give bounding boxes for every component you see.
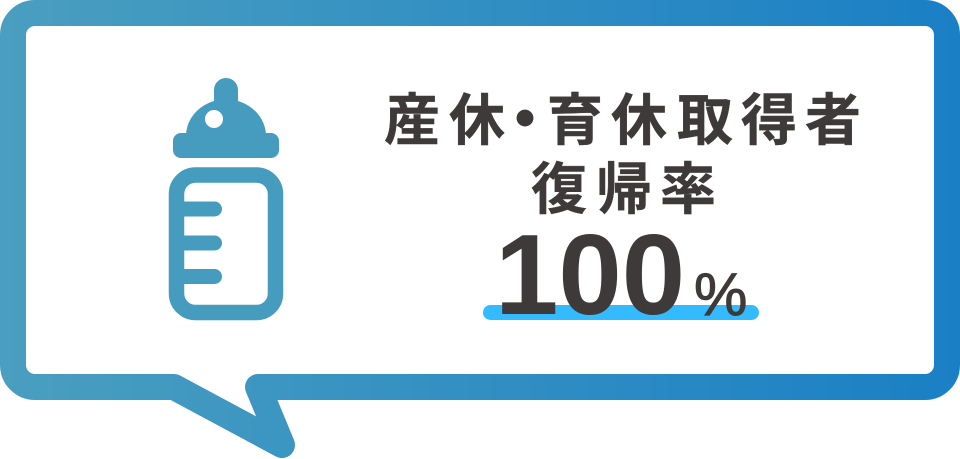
heading line 1: 産休 — [384, 89, 505, 152]
bottle body — [176, 175, 276, 312]
bottle hole — [205, 110, 223, 128]
bottle measuring ticks — [180, 209, 214, 276]
heading line 1: ・ — [492, 83, 558, 157]
bottle nipple and dome — [186, 78, 266, 135]
heading line 2: 復帰率 — [531, 158, 716, 221]
bottle collar — [173, 133, 279, 158]
underline highlight — [483, 305, 759, 320]
heading line 1: 育休取得者 — [547, 89, 861, 152]
percent sign: % — [694, 261, 747, 328]
icon: baby bottle — [173, 78, 279, 312]
value 100: 100 — [495, 212, 685, 339]
